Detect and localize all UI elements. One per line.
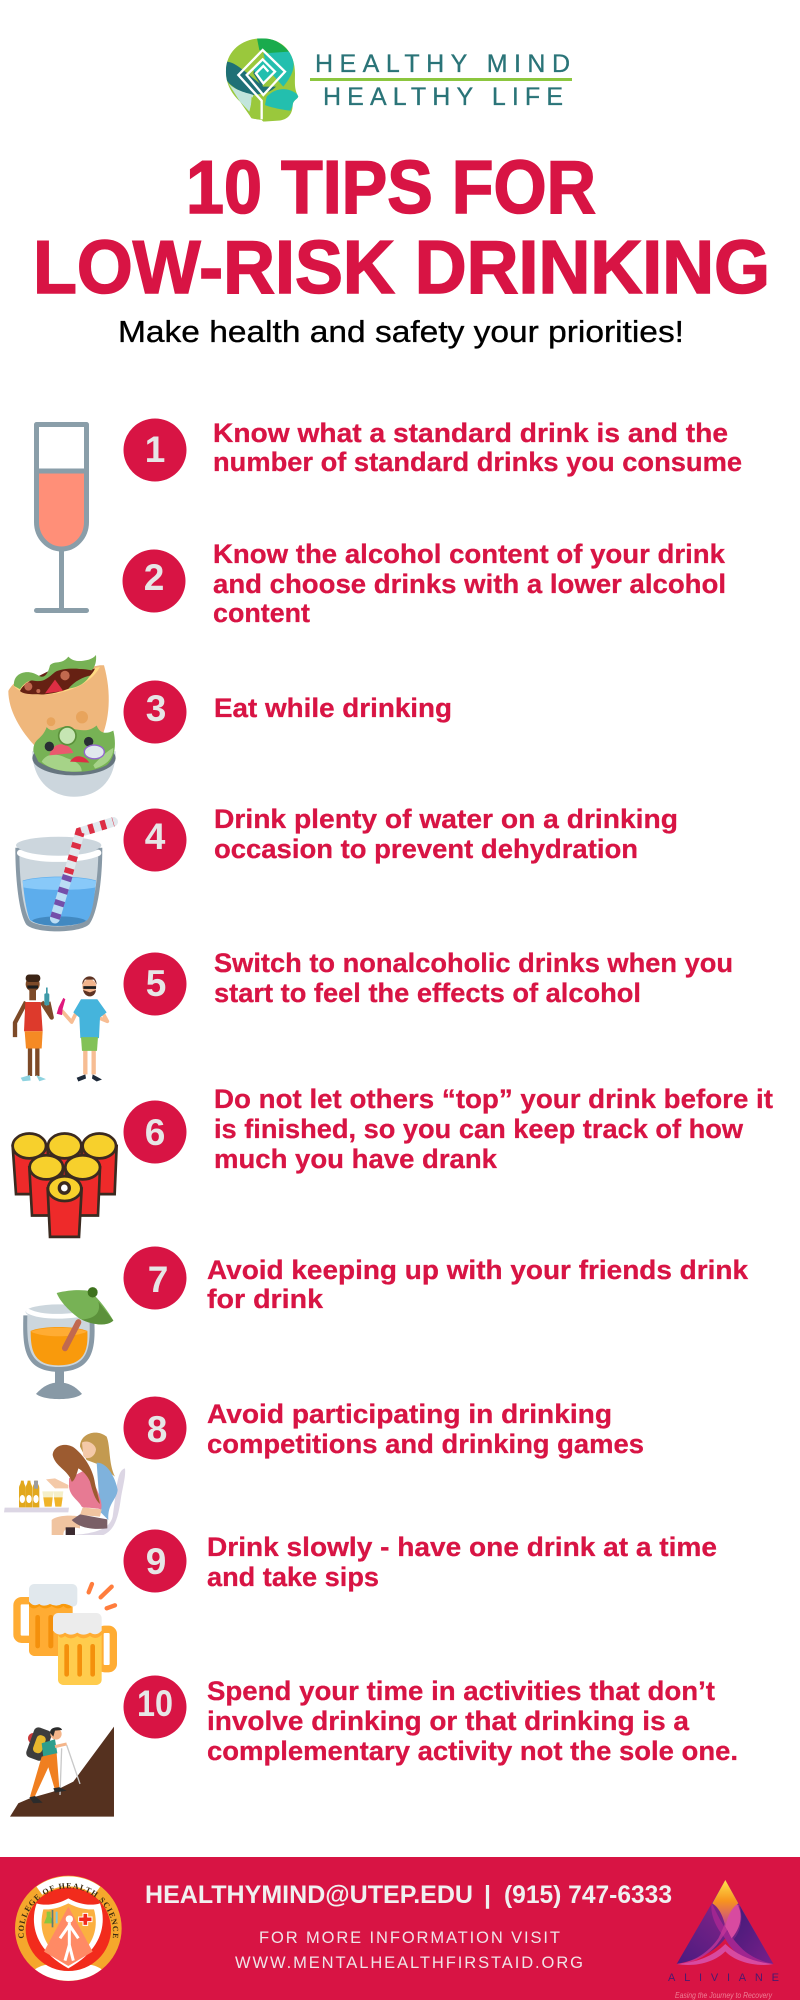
icon: water glass with straw [15, 822, 113, 931]
clink rays [89, 1584, 115, 1608]
tip 1 [124, 418, 742, 482]
chair [73, 1468, 125, 1535]
Aliviane logo [668, 1880, 779, 2000]
Aliviane tagline: Easing the Journey to Recovery [675, 1990, 773, 2000]
tip 6 text: much you have drank [214, 1144, 498, 1174]
tip 4 text [214, 804, 678, 864]
tip 9 text: Drink slowly - have one drink at a time [207, 1532, 717, 1562]
logo divider [310, 78, 572, 81]
tip 1 text: Know what a standard drink is and the [213, 418, 728, 448]
icon: wine flute [34, 424, 89, 613]
title: 10 TIPS FOR [186, 145, 596, 229]
tip 5 text [214, 948, 733, 1008]
badge 8: 8 [147, 1409, 167, 1450]
tip 7 [124, 1246, 749, 1314]
badge 6: 6 [145, 1112, 165, 1153]
badge 10: 10 [137, 1683, 173, 1724]
icon: hiker on a mountain [10, 1726, 114, 1817]
tip 4 text: occasion to prevent dehydration [214, 834, 638, 864]
tip 2 [122, 539, 726, 628]
tip 5 [124, 948, 733, 1016]
back mug [17, 1584, 77, 1656]
title: LOW-RISK DRINKING [33, 225, 770, 309]
tip 7 text: Avoid keeping up with your friends drink [207, 1255, 749, 1285]
more information text: FOR MORE INFORMATION VISIT [259, 1929, 560, 1947]
icon: cocktail with umbrella [23, 1287, 113, 1399]
salad bowl [32, 725, 116, 797]
icon: pita and salad [8, 655, 116, 797]
tip 5 text: start to feel the effects of alcohol [214, 978, 641, 1008]
tip 8 text: competitions and drinking games [207, 1429, 644, 1459]
badge 10 [124, 1676, 186, 1738]
icon: head with spiral [226, 38, 298, 122]
mountain [10, 1727, 114, 1817]
tip 1 text: number of standard drinks you consume [213, 447, 742, 477]
man left [15, 974, 52, 1081]
tip 3 [124, 680, 452, 744]
more information text [235, 1929, 583, 1972]
badge 7 [124, 1246, 186, 1310]
icon: two women drinking at a table [4, 1433, 125, 1535]
tip 10 text: Spend your time in activities that don’t [207, 1676, 715, 1706]
tip 10 [124, 1676, 738, 1766]
tip 6 text: is finished, so you can keep track of how [214, 1114, 744, 1144]
badge 9: 9 [146, 1541, 166, 1582]
badge 3 [124, 680, 186, 744]
logo text: Healthy Mind: HEALTHY MIND [315, 50, 570, 78]
tip 2 text: and choose drinks with a lower alcohol [213, 569, 726, 599]
icon: two men with bottles [15, 974, 107, 1082]
tip 9 [124, 1530, 717, 1592]
badge 1 [124, 418, 186, 482]
tip 6 text: Do not let others “top” your drink before it [214, 1084, 773, 1114]
college of health sciences seal [15, 1876, 122, 1981]
tip 7 text: for drink [207, 1284, 324, 1314]
badge 2: 2 [144, 557, 164, 598]
table with bottles and glasses [4, 1481, 69, 1512]
hiker [25, 1726, 80, 1803]
pita [8, 655, 109, 748]
tip 10 text: involve drinking or that drinking is a [207, 1706, 690, 1736]
contact line: (915) 747-6333 [504, 1881, 672, 1909]
badge 2 [122, 550, 186, 612]
contact line: HEALTHYMIND@UTEP.EDU [145, 1881, 473, 1909]
tip 9 text: and take sips [207, 1562, 379, 1592]
badge 1: 1 [145, 429, 165, 470]
man right [57, 976, 107, 1082]
badge 4 [124, 808, 186, 872]
tip 8 [124, 1396, 644, 1460]
tip 10 text: complementary activity not the sole one. [207, 1736, 738, 1766]
tip 10 text [207, 1676, 738, 1766]
badge 7: 7 [148, 1259, 168, 1300]
front mug [53, 1613, 113, 1685]
tip 8 text: Avoid participating in drinking [207, 1399, 612, 1429]
tip 3 text: Eat while drinking [214, 693, 452, 723]
brunette woman [46, 1445, 107, 1535]
tip 4 [124, 804, 678, 872]
blonde woman [80, 1433, 118, 1520]
tip 6 text [214, 1084, 773, 1174]
badge 4: 4 [145, 816, 166, 857]
subtitle: Make health and safety your priorities! [118, 314, 684, 349]
tip 2 text: content [213, 598, 310, 628]
footer band [0, 1857, 800, 2000]
more information text: WWW.MENTALHEALTHFIRSTAID.ORG [235, 1954, 583, 1972]
title [33, 145, 770, 309]
tip 8 text [207, 1399, 644, 1459]
college of health sciences seal: COLLEGE OF HEALTH SCIENCES [18, 1883, 118, 1938]
Aliviane wordmark: ALIVIANE [668, 1972, 779, 1984]
tip 2 text: Know the alcohol content of your drink [213, 539, 726, 569]
icon: beer pong cups [13, 1134, 117, 1237]
tip 6 [124, 1084, 773, 1174]
logo text: Healthy Life: HEALTHY LIFE [323, 83, 563, 111]
badge 6 [124, 1100, 186, 1164]
icon: clinking beer mugs [17, 1584, 115, 1685]
badge 8 [124, 1396, 186, 1460]
tip 7 text [207, 1255, 749, 1314]
tip 1 text [213, 418, 742, 477]
badge 5: 5 [146, 963, 166, 1004]
badge 9 [124, 1530, 186, 1592]
logo: Healthy Mind Healthy Life [226, 38, 572, 122]
tip 4 text: Drink plenty of water on a drinking [214, 804, 678, 834]
contact line: | [484, 1881, 491, 1909]
tip 9 text [207, 1532, 717, 1592]
badge 3: 3 [146, 688, 166, 729]
tip 5 text: Switch to nonalcoholic drinks when you [214, 948, 733, 978]
badge 5 [124, 952, 186, 1016]
contact line [145, 1881, 672, 1909]
tip 2 text [213, 539, 726, 628]
